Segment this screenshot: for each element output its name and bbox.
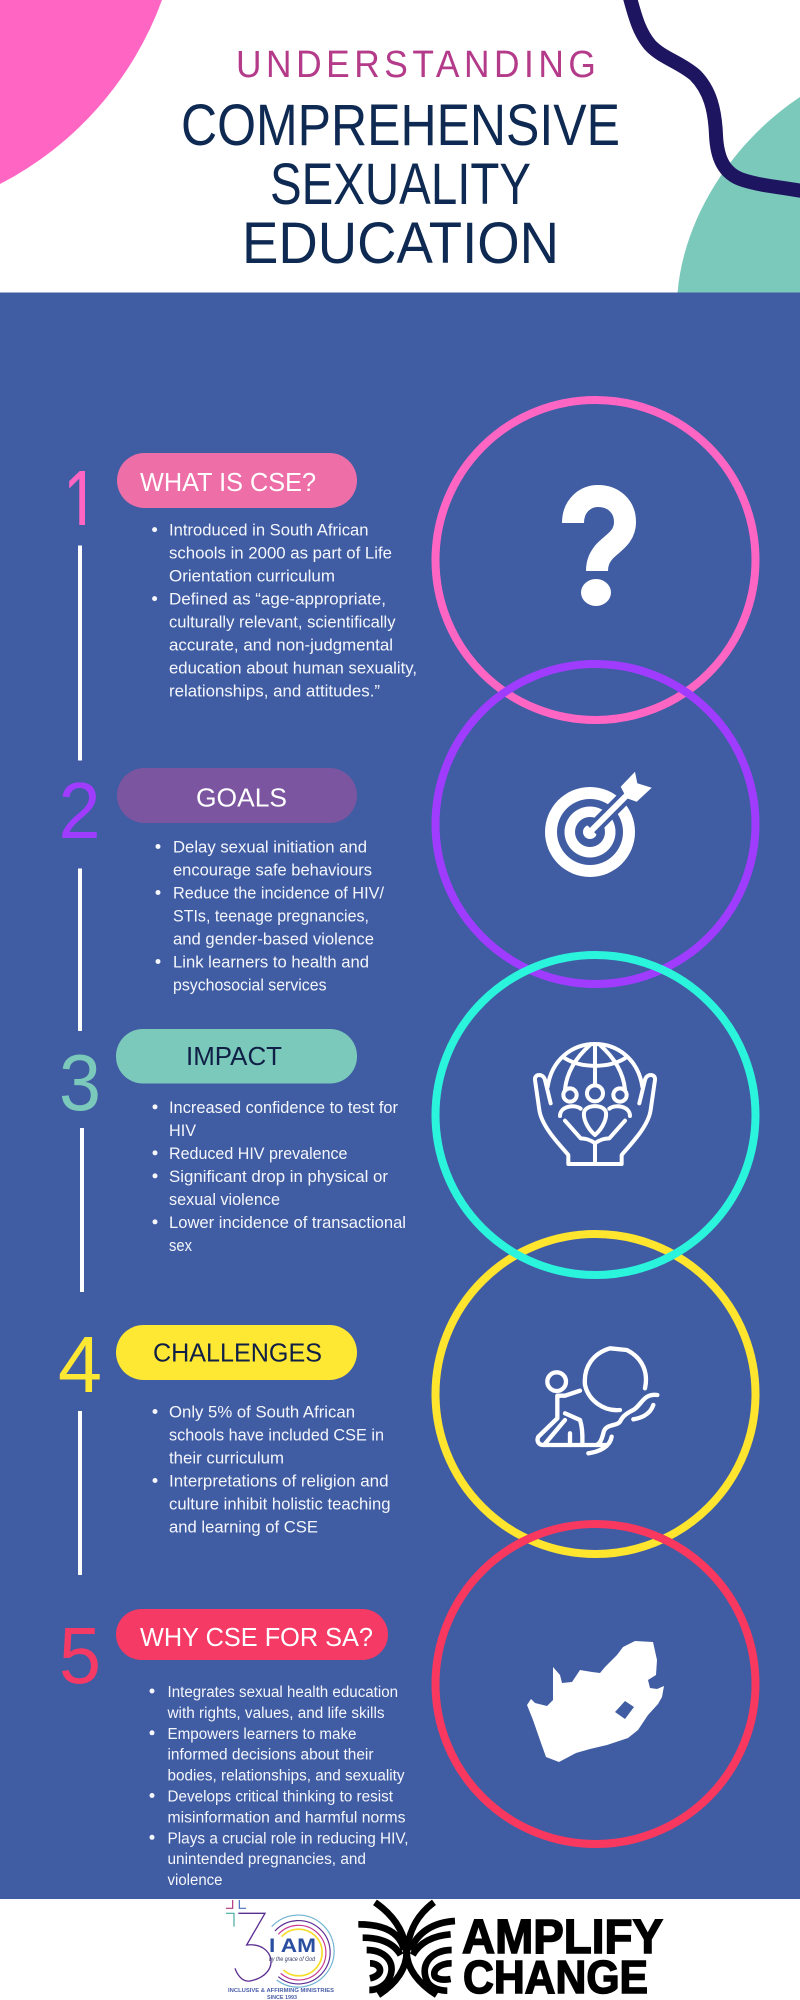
bullet list: Only 5% of South African [169,1404,355,1422]
bullet list: HIV [169,1122,196,1140]
heading label: WHY CSE FOR SA? [140,1622,373,1652]
title [181,43,620,276]
section 2: goals [58,766,384,1031]
bullet list: sexual violence [169,1191,280,1209]
bullet list: encourage safe behaviours [173,862,372,880]
heading label: CHALLENGES [153,1338,322,1368]
bullet list: psychosocial services [173,976,326,994]
bullet list: bodies, relationships, and sexuality [168,1768,405,1785]
number 4: 4 [58,1320,102,1409]
bullet list: violence [168,1872,222,1889]
ring: what is CSE [436,400,756,720]
icon: South Africa map [527,1641,664,1762]
bullet list: accurate, and non-judgmental [169,636,393,654]
bullet list: and gender-based violence [173,930,374,948]
bullet list: Link learners to health and [173,954,369,972]
timeline line [78,546,82,760]
timeline line [80,1128,84,1292]
decorative teal circle [678,97,800,293]
footer logo: I AM 30 years: INCLUSIVE & AFFIRMING MINISTRIES [228,1988,334,1994]
heading label: IMPACT [186,1041,282,1071]
heading label: GOALS [196,782,287,812]
pill heading [116,1029,357,1084]
timeline line [78,868,82,1031]
bullet list: Defined as “age-appropriate, [169,591,386,609]
icon: question mark [573,496,625,606]
bullet list: Integrates sexual health education [168,1684,398,1701]
bullet list: culturally relevant, scientifically [169,614,396,632]
pill heading [117,768,357,823]
bullet list: and learning of CSE [169,1518,318,1536]
bullet list: Reduced HIV prevalence [169,1145,348,1163]
pill heading [117,453,357,508]
header background [0,0,800,293]
pill heading [116,1325,357,1380]
footer logo: I AM 30 years: I AM [269,1936,316,1957]
bullet list: informed decisions about their [168,1747,374,1764]
decorative navy squiggle [630,0,800,191]
icon: person pushing a boulder uphill [538,1348,657,1453]
ring: why CSE for SA [436,1524,756,1844]
bullet list: Lower incidence of transactional [169,1214,406,1232]
footer logo: Amplify Change [358,1902,663,2000]
section 4: challenges [58,1320,390,1575]
bullet list: Significant drop in physical or [169,1168,389,1186]
title line 2: SEXUALITY [270,152,531,217]
icon: hands holding globe with people [535,1044,655,1164]
bullet list: Plays a crucial role in reducing HIV, [168,1830,408,1847]
footer logo: Amplify Change: AMPLIFY [462,1911,663,1964]
bullet list: Reduce the incidence of HIV/ [173,884,384,902]
bullet list: with rights, values, and life skills [167,1705,385,1722]
bullet list: education about human sexuality, [169,660,417,678]
icon: target with arrow [545,772,652,877]
section 1: what is CSE [63,453,417,760]
ring: challenges [436,1234,756,1554]
footer logo: I AM 30 years: by the grace of God [269,1957,316,1963]
bullet list [152,522,417,700]
pill heading [116,1609,388,1660]
bullet list: Develops critical thinking to resist [168,1788,394,1806]
title kicker: UNDERSTANDING [236,43,596,85]
bullet list: unintended pregnancies, and [168,1851,366,1868]
bullet list: Delay sexual initiation and [173,838,367,856]
title line 1: COMPREHENSIVE [181,93,620,158]
number 1: 1 [63,453,99,553]
bullet list: STIs, teenage pregnancies, [173,908,369,926]
ring: impact [436,955,756,1275]
bullet list: misinformation and harmful norms [168,1809,406,1826]
bullet list: Empowers learners to make [168,1726,356,1743]
bullet list: Interpretations of religion and [169,1472,388,1490]
bullet list [150,1684,408,1889]
bullet list: Increased confidence to test for [169,1099,399,1117]
number 2: 2 [58,766,100,855]
section 5: why CSE for SA [59,1609,408,1889]
bullet list: Introduced in South African [169,522,368,540]
section 3: impact [59,1029,406,1292]
number 3: 3 [59,1038,101,1127]
bullet list [152,1404,390,1536]
bullet list: sex [169,1237,193,1255]
bullet list: culture inhibit holistic teaching [169,1496,390,1514]
ring: goals [436,664,756,984]
bullet list [156,838,384,994]
timeline line [78,1411,82,1575]
footer logo: I AM 30 years [226,1900,334,2000]
title line 3: EDUCATION [242,211,559,276]
bullet list: schools have included CSE in [169,1426,384,1444]
bullet list: schools in 2000 as part of Life [169,545,392,563]
heading label: WHAT IS CSE? [140,467,316,497]
decorative pink circle [0,0,162,184]
bullet list: Orientation curriculum [169,568,335,586]
number 5: 5 [59,1611,101,1700]
bullet list: relationships, and attitudes.” [169,682,380,700]
bullet list [152,1099,406,1255]
bullet list: their curriculum [169,1450,284,1468]
